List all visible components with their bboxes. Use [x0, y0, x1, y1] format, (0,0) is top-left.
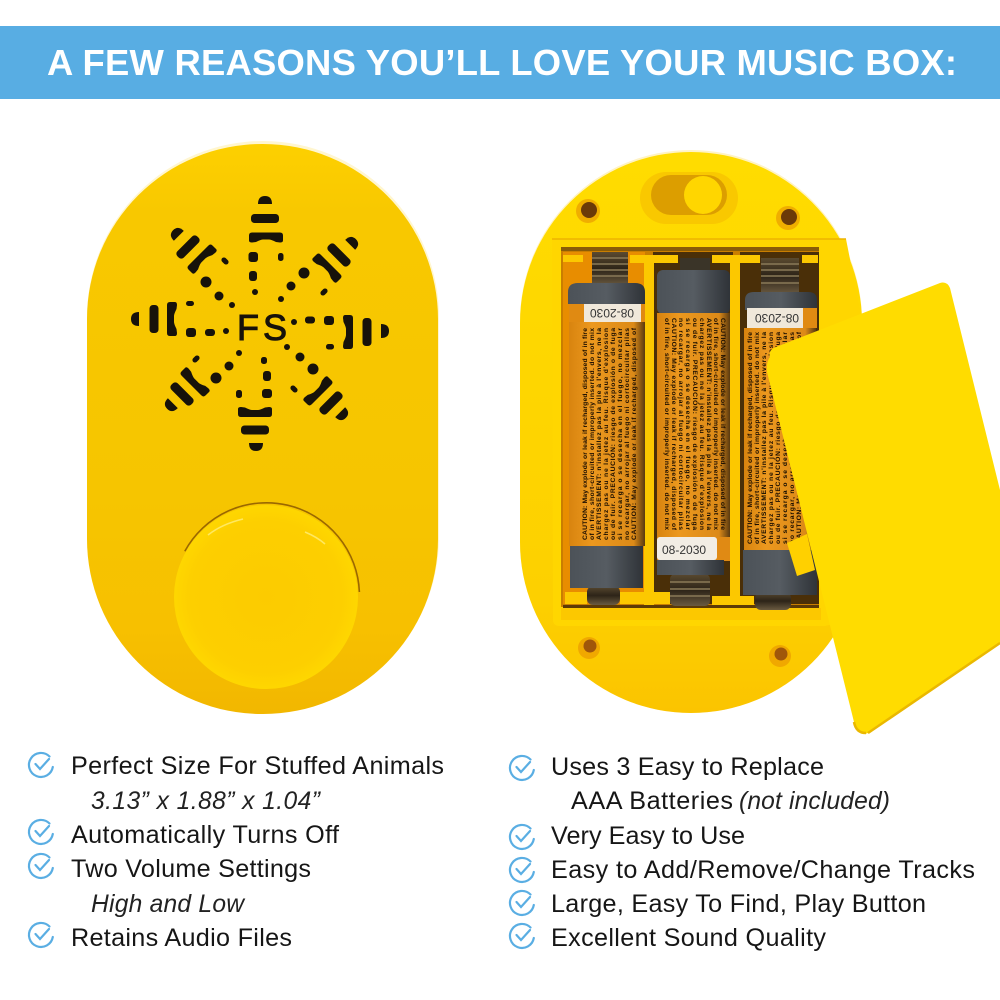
battery 3: CAUTION: May explode or leak if recharged, disposed of in fire: [747, 332, 754, 544]
battery 2: CAUTION: May explode or leak if recharged, disposed of: [670, 318, 677, 531]
feature: tracks: Easy to Add/Remove/Change Tracks: [551, 856, 975, 884]
feature detail: AAA batteries: [571, 787, 890, 815]
battery 3: no recargar, no arrojar al fuego ni cortocircuitar pilas: [789, 332, 796, 544]
icon: check: [510, 924, 534, 948]
feature: size: Perfect Size For Stuffed Animals: [71, 752, 444, 780]
feature list: left column: [29, 752, 444, 952]
battery 1: chargez pas ou ne la jetez au feu. Risque d'explosion: [603, 328, 610, 540]
battery dividers: [561, 255, 821, 620]
feature: auto off: Automatically Turns Off: [71, 821, 340, 849]
screw holes: [576, 199, 800, 667]
icon: check: [510, 756, 534, 780]
panel: music box back with batteries: [520, 150, 1000, 734]
battery 3: CAUTION: May explode or leak if recharged, disposed of: [796, 331, 803, 544]
battery 1: ou de fuir. PRECAUCIÓN: riesgo de explosión o de fuga: [608, 328, 617, 540]
battery 2: si se recarga o se desecha en el fuego, no mezclar: [684, 318, 691, 530]
battery 1: of in fire, short-circuited or improperly inserted. do not mix: [589, 328, 596, 540]
feature: play button: Large, Easy To Find, Play Button: [551, 890, 926, 918]
icon: check: [510, 891, 534, 915]
icon: check: [510, 825, 534, 849]
FS logo text: FS: [237, 307, 287, 348]
battery 2: of in fire, short-circuited or improperly inserted. do not mix: [663, 318, 670, 530]
icon: check: [29, 923, 53, 947]
battery 3: AVERTISSEMENT: n'installez pas la pile à l'envers, ne la: [761, 332, 768, 544]
battery 1: 08-2030: [590, 306, 634, 320]
battery 3: si se recarga o se desecha en el fuego, no mezclar: [782, 332, 789, 544]
battery 2: [657, 258, 730, 606]
play button: [174, 503, 359, 689]
battery 2: of in fire, short-circuited or improperly inserted. do not mix: [712, 318, 719, 530]
battery 1: CAUTION: May explode or leak if recharged, disposed of in fire: [582, 328, 589, 540]
feature detail: dimensions: 3.13” x 1.88” x 1.04”: [91, 788, 322, 815]
battery 2: no recargar, no arrojar al fuego ni cortocircuitar pilas: [677, 318, 684, 530]
battery 2: CAUTION: May explode or leak if recharged, disposed of in fire: [719, 318, 726, 530]
icon: check: [510, 858, 534, 882]
icon: check: [29, 820, 53, 844]
feature: retains audio: Retains Audio Files: [71, 924, 292, 952]
feature: batteries: Uses 3 Easy to Replace: [551, 753, 824, 781]
battery 2: AVERTISSEMENT: n'installez pas la pile à l'envers, ne la: [705, 318, 712, 530]
battery 3: of in fire, short-circuited or improperly inserted. do not mix: [754, 332, 761, 544]
feature detail: AAA batteries: (not included): [739, 788, 890, 815]
feature: volume: Two Volume Settings: [71, 855, 311, 883]
panel: music box front: [87, 141, 439, 714]
feature list: right column: [510, 753, 975, 952]
title banner: [0, 26, 1000, 99]
feature detail: AAA batteries: AAA Batteries: [571, 787, 733, 815]
battery 1: no recargar, no arrojar al fuego ni cortocircuitar pilas: [624, 328, 631, 540]
icon: check: [29, 753, 53, 777]
battery cover lid: [767, 283, 1000, 734]
feature: sound quality: Excellent Sound Quality: [551, 924, 826, 952]
icon: check: [29, 854, 53, 878]
power switch: [640, 172, 738, 224]
battery 1: [568, 252, 645, 605]
battery 1: CAUTION: May explode or leak if recharged, disposed of: [631, 327, 638, 540]
feature detail: volume levels: High and Low: [91, 891, 246, 918]
speaker grille logo: [131, 196, 389, 451]
battery 1: si se recarga o se desecha en el fuego, no mezclar: [617, 328, 624, 540]
battery 3: chargez pas ou ne la jetez au feu. Risque d'explosion: [768, 332, 775, 544]
battery 3: [743, 258, 817, 610]
battery 3: 08-2030: [755, 311, 799, 325]
battery 2: chargez pas ou ne la jetez au feu. Risque d'explosion: [698, 318, 705, 530]
battery 3: ou de fuir. PRECAUCIÓN: riesgo de explosión o de fuga: [773, 332, 782, 544]
battery compartment: [552, 239, 862, 626]
battery 2: ou de fuir. PRECAUCIÓN: riesgo de explosión o de fuga: [691, 318, 700, 530]
feature: easy to use: Very Easy to Use: [551, 822, 745, 850]
title banner: A FEW REASONS YOU’LL LOVE YOUR MUSIC BOX:: [47, 42, 957, 83]
battery 2: 08-2030: [662, 543, 706, 557]
battery 1: AVERTISSEMENT: n'installez pas la pile à l'envers, ne la: [596, 328, 603, 540]
